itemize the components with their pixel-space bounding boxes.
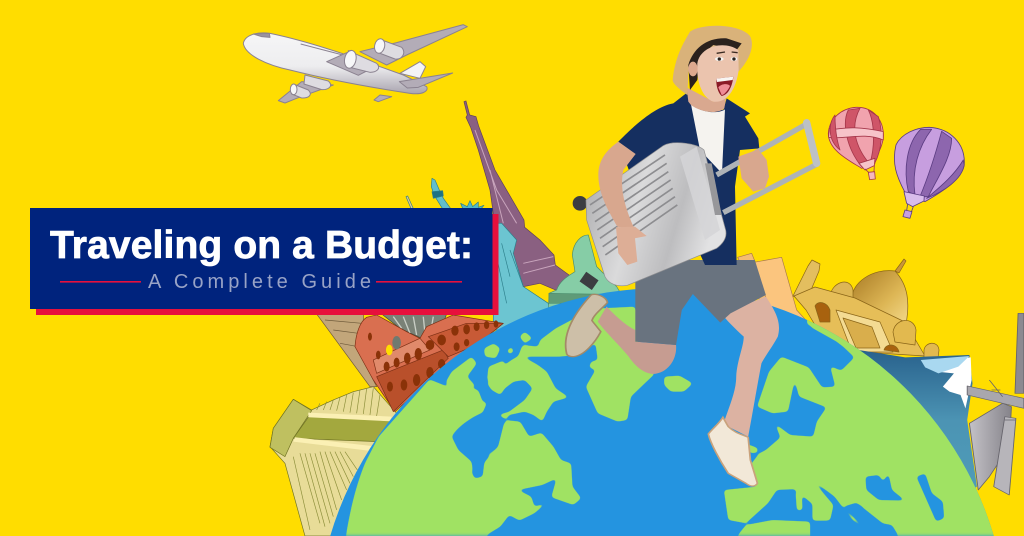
illustration: Chichen Itza pyramid xyxy=(270,387,397,536)
undershirt xyxy=(691,104,725,173)
back shoe xyxy=(566,294,607,357)
chart: globe xyxy=(330,288,994,536)
face xyxy=(697,45,739,102)
snow cap xyxy=(923,357,972,408)
hair xyxy=(688,38,742,90)
subtitle rule right xyxy=(376,281,462,283)
banner shadow xyxy=(36,214,498,315)
illustration: Taj Mahal xyxy=(793,259,939,358)
luggage handle xyxy=(717,124,817,213)
illustration: green seated statue xyxy=(548,235,633,313)
illustration: Colosseum xyxy=(355,315,503,412)
shirt xyxy=(618,92,759,265)
neck xyxy=(687,87,726,112)
subtitle: A Complete Guide xyxy=(148,271,371,293)
title banner xyxy=(30,208,498,315)
shorts xyxy=(635,260,766,345)
spire xyxy=(895,259,906,273)
illustration: tan folded pyramid xyxy=(738,253,813,330)
title: Traveling on a Budget: xyxy=(50,224,473,267)
ocean xyxy=(330,288,994,536)
banner panel xyxy=(30,208,492,309)
hat xyxy=(673,26,752,95)
back leg xyxy=(598,307,676,374)
near hand xyxy=(616,227,647,265)
photo figure: jumping traveler xyxy=(566,26,817,486)
far forearm and hand xyxy=(738,149,769,192)
wheels xyxy=(573,196,587,211)
right domes xyxy=(893,320,916,345)
mouth xyxy=(716,77,733,96)
illustration: Statue of Liberty xyxy=(406,178,563,330)
illustration: Eiffel Tower xyxy=(464,101,571,310)
front leg xyxy=(722,297,779,437)
illustration: Big Ben tower xyxy=(317,314,377,387)
icon: pink balloon xyxy=(828,107,883,180)
main dome xyxy=(852,271,908,324)
lower body and legs xyxy=(566,260,779,486)
main building xyxy=(794,287,925,356)
illustration: grey capitol dome xyxy=(382,314,447,338)
near arm xyxy=(598,142,636,230)
illustration: hot air balloons xyxy=(828,107,964,218)
suitcase xyxy=(586,143,726,286)
illustration: windmill xyxy=(967,313,1024,495)
illustration: Mount Fuji card xyxy=(854,349,977,493)
continents xyxy=(330,288,994,536)
icon: purple balloon xyxy=(894,127,964,218)
arch xyxy=(815,303,830,322)
subtitle rule left xyxy=(60,281,141,283)
front shoe xyxy=(708,417,757,486)
illustration: airplane xyxy=(243,25,467,103)
upper body xyxy=(573,26,817,290)
small domes xyxy=(830,282,853,302)
left minaret xyxy=(793,260,820,302)
